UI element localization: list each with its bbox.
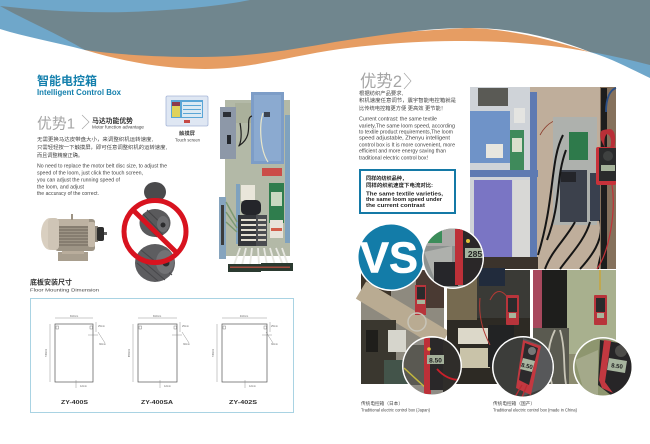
text: advantage 2 description: speed adjustable, Zhenyu intelligent (359, 136, 451, 142)
diagram: ZY-400SA: 655mm (128, 349, 131, 357)
heading: advantage 1: 马达功能优势 (92, 116, 133, 125)
inset: meter reading Japan (402, 336, 462, 394)
caption: China control box: 传统电控箱（国产） (493, 400, 535, 407)
diagram: ZY-402S (212, 315, 278, 406)
diagram: ZY-400SA: 12mm (164, 385, 171, 388)
header wave banner (0, 0, 650, 78)
callout: same loom speed contrast: the current contrast (366, 203, 425, 209)
diagram: ZY-400S: ZY-400S (61, 400, 88, 406)
icon: touch screen: 触摸屏 (179, 129, 196, 137)
text: advantage 1 description: 而且调整精度正确。 (37, 151, 83, 159)
title: intelligent control box: 智能电控箱 (37, 73, 97, 88)
blue power module (251, 92, 284, 164)
text: advantage 1 description (37, 135, 167, 197)
image: control box interior (219, 92, 293, 272)
diagram: ZY-400SA: 30mm (183, 343, 190, 346)
text: advantage 2 description: efficient and more energy saving than (359, 149, 446, 155)
icon: touch screen (166, 96, 208, 142)
badge: VS: VS (360, 234, 418, 282)
heading: floor mounting dimension: 底板安装尺寸 (30, 278, 72, 286)
diagram: ZY-402S: 410mm (240, 315, 248, 318)
diagram: ZY-400S: 25mm (98, 325, 105, 328)
text: advantage 2 description: variety,The same loom speed, according (359, 124, 455, 130)
inset: meter reading China 1 (492, 336, 554, 396)
text: advantage 1 description: you can adjust the running speed of (37, 178, 121, 184)
text: advantage 2 description: 根据纺织产品要求, (359, 89, 403, 97)
callout: same loom speed contrast: 同样的织机速度下电流对比: (366, 181, 433, 189)
heading: advantage 1: Motor function advantage (92, 125, 144, 130)
callout: same loom speed contrast: 同样的纺织品种， (366, 174, 407, 182)
text: advantage 2 description: 比传统电控箱更方便 更高效 更节能！ (359, 104, 446, 112)
caption: Japan control box (361, 400, 431, 412)
image: belt pulleys with prohibition sign (124, 182, 186, 282)
inset: meter reading 285 (422, 228, 484, 289)
diagram: ZY-402S: ZY-402S (229, 400, 257, 406)
caption: China control box (493, 400, 578, 412)
text: advantage 2 description: to textile product requirements,The loom (359, 130, 453, 136)
text: advantage 2 description: Current contrast: the same textile (359, 117, 437, 123)
text: advantage 1 description: 无需更换马达皮带盘大小，来调整织机运转速度, (37, 135, 153, 143)
callout: same loom speed contrast: the same loom speed under (366, 197, 443, 203)
icon: touch screen: Touch screen (175, 138, 201, 142)
callout: same loom speed contrast: The same textile varieties, (366, 192, 443, 198)
photo: intelligent control box wiring (470, 87, 616, 269)
inset: meter reading China 2: 8.50 (611, 363, 624, 371)
caption: Japan control box: Traditional electric control box (Japan) (361, 408, 431, 412)
text: advantage 2 description (359, 89, 457, 162)
badge: VS (357, 223, 425, 291)
inset: meter reading Japan: 8.50 (429, 358, 442, 364)
inset: meter reading 285: 285 (468, 249, 482, 259)
text: advantage 2 description: control box is It is more convenient, more (359, 143, 455, 149)
inset: meter reading China 2 (573, 337, 632, 396)
diagram: ZY-400SA: 310mm (153, 315, 161, 318)
diagram: ZY-400S: 12mm (80, 385, 87, 388)
diagram: ZY-400SA (128, 315, 190, 406)
panel: mounting diagrams (30, 298, 294, 412)
text: advantage 2 description: 积机速度任意调节，震宇智能电控箱就是 (359, 96, 457, 104)
title: intelligent control box (37, 73, 122, 97)
heading: advantage 2: 优势2 (360, 72, 402, 91)
clamp meter (596, 129, 616, 185)
photo: traditional control box China, middle (447, 268, 530, 384)
diagram: ZY-402S: 745mm (212, 349, 215, 357)
text: advantage 1 description: No need to replace the motor belt disc size, to adjust the (37, 164, 167, 170)
diagram: ZY-402S: 25mm (271, 325, 278, 328)
caption: Japan control box: 传统电控箱（日本） (361, 400, 403, 407)
photo: traditional control box Japan (361, 270, 444, 384)
heading: advantage 1 (37, 115, 144, 132)
diagram: ZY-400SA: 25mm (182, 325, 189, 328)
diagram: ZY-400S: 310mm (70, 315, 78, 318)
diagram: ZY-402S: 30mm (271, 343, 278, 346)
diagram: ZY-400S: 30mm (99, 343, 106, 346)
diagram: ZY-400S: 745mm (45, 349, 48, 357)
heading: advantage 1: 优势1 (37, 116, 75, 132)
text: advantage 2 description: traditional electric control box! (359, 156, 428, 162)
inset: meter reading China 1: 8.50 (520, 363, 534, 371)
photo: traditional control box China, right (533, 270, 616, 384)
diagram: ZY-400SA: ZY-400SA (141, 400, 173, 406)
title: intelligent control box: Intelligent Control Box (37, 88, 122, 97)
text: advantage 1 description: the loom, and adjust (37, 185, 85, 191)
callout: same loom speed contrast (360, 170, 455, 213)
servo drive (220, 107, 252, 159)
image: electric motor (41, 214, 107, 261)
diagram: ZY-402S: 12mm (249, 385, 256, 388)
text: advantage 1 description: 只需轻轻按一下触摸屏，即可任意调整织机的运转速度, (37, 143, 167, 151)
caption: China control box: Traditional electric control box (made in China) (493, 408, 578, 412)
heading: floor mounting dimension: Floor Mounting Dimension (30, 288, 99, 294)
text: advantage 1 description: speed of the loom, just click the touch screen, (37, 171, 143, 177)
heading: floor mounting dimension (30, 278, 99, 294)
diagram: ZY-400S (45, 315, 106, 406)
text: advantage 1 description: the accuracy of the correct. (37, 191, 99, 197)
